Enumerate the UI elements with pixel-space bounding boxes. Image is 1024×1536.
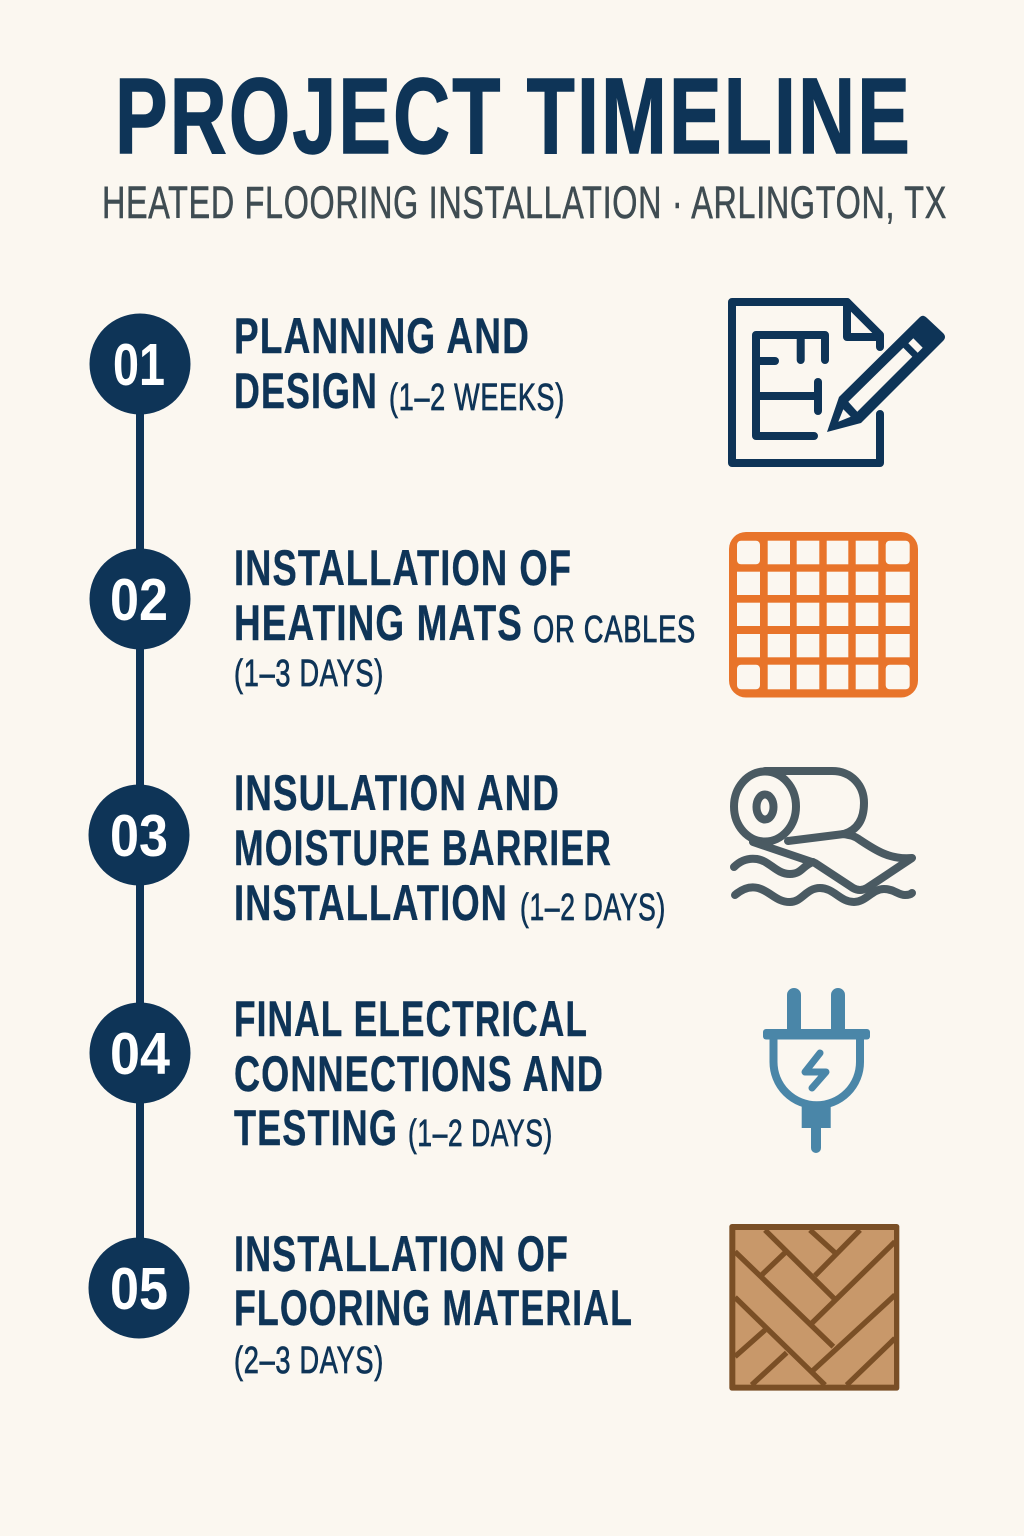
icon: electrical plug [763, 988, 870, 1153]
step 1 text [234, 308, 565, 419]
step 3 text [234, 765, 666, 931]
step 1 number badge [90, 314, 190, 414]
step 2 text: (1–3 DAYS) [234, 653, 384, 695]
step 3 text: INSULATION AND [234, 765, 560, 821]
step 2 text: HEATING MATS [234, 595, 523, 651]
icon: herringbone wood flooring [729, 1224, 899, 1391]
step 5 [88, 1224, 899, 1391]
step 4 text: CONNECTIONS AND [234, 1046, 604, 1102]
step 5 text: FLOORING MATERIAL [234, 1280, 633, 1336]
step 3 number badge: 03 [110, 803, 168, 869]
icon: insulation roll and moisture waves [734, 771, 912, 902]
step 2 number badge [90, 548, 190, 650]
step 3 text: MOISTURE BARRIER [234, 820, 612, 876]
step 2 [90, 532, 918, 698]
step 3 text: INSTALLATION [234, 875, 508, 931]
step 4 text: FINAL ELECTRICAL [234, 991, 588, 1047]
step 3 text: (1–2 DAYS) [520, 887, 666, 929]
step 5 text: (2–3 DAYS) [234, 1340, 384, 1382]
step 2 text [234, 540, 696, 695]
step 4 number badge [90, 1002, 190, 1104]
step 1 text: PLANNING AND [234, 308, 530, 364]
step 3 [88, 765, 912, 931]
step 5 text: INSTALLATION OF [234, 1226, 569, 1282]
step 1 text: (1–2 WEEKS) [389, 377, 565, 419]
step 4 number badge: 04 [110, 1021, 170, 1087]
step 4 [90, 988, 870, 1156]
step 3 number badge [88, 784, 190, 886]
icon: blueprint and pencil [732, 302, 945, 463]
step 5 number badge [88, 1238, 190, 1338]
step 2 text: INSTALLATION OF [234, 540, 572, 596]
step 1 number badge: 01 [113, 332, 165, 398]
timeline connector [136, 364, 144, 1288]
step 1 [90, 302, 945, 463]
step 4 text: TESTING [234, 1100, 398, 1156]
step 5 number badge: 05 [110, 1256, 168, 1322]
step 4 text [234, 991, 604, 1156]
icon: heating mat grid [729, 532, 918, 698]
step 4 text: (1–2 DAYS) [408, 1113, 553, 1155]
step 2 text: OR CABLES [533, 609, 696, 651]
step 5 text [234, 1226, 633, 1382]
step 1 text: DESIGN [234, 363, 378, 419]
step 2 number badge: 02 [110, 567, 168, 633]
